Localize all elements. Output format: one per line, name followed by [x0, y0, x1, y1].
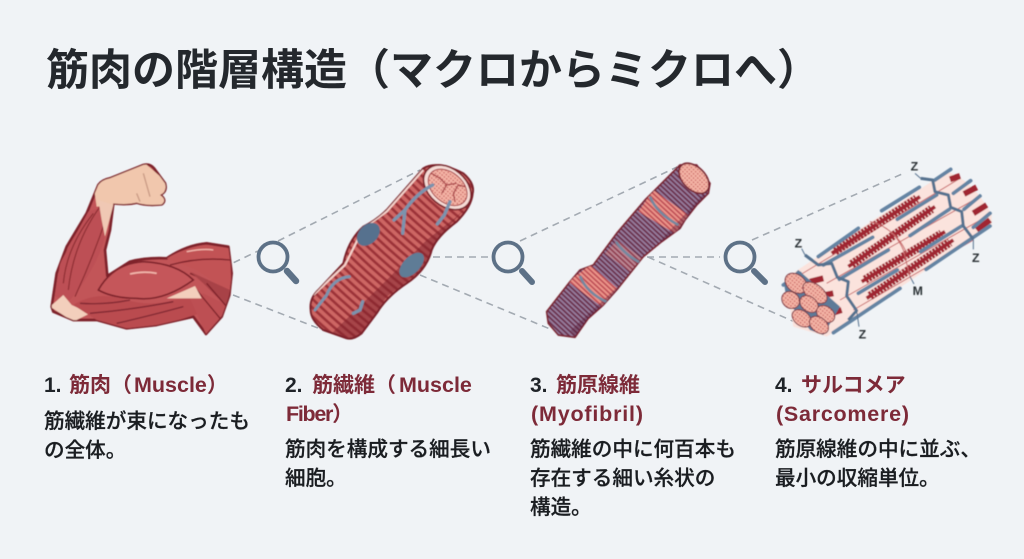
- labels Z and M: Z: [972, 251, 980, 265]
- text block: 2 muscle fiber: 2.: [285, 374, 303, 397]
- blue actin filaments: [783, 169, 990, 333]
- thin filaments: [800, 178, 983, 310]
- text block: 4 sarcomere: 4.: [775, 374, 793, 397]
- text block: 2 muscle fiber: [285, 373, 491, 490]
- end rim: [784, 270, 840, 335]
- illustration: myofibril: [547, 158, 715, 337]
- front ellipses: [778, 269, 838, 337]
- connector lines: muscle to fiber: [212, 170, 420, 330]
- text block: 3 myofibril: 筋原線維: [556, 374, 640, 397]
- labels Z and M: Z: [795, 236, 803, 250]
- connector lines: myofibril to sarcomere: [647, 174, 902, 323]
- text block: 1 muscle: 筋繊維が束になったも: [44, 410, 250, 433]
- text block: 4 sarcomere: サルコメア: [801, 374, 906, 397]
- text block: 1 muscle: 筋肉（: [69, 374, 132, 397]
- Z disks: [805, 178, 973, 320]
- text block: 3 myofibril: [530, 374, 736, 519]
- text block: 2 muscle fiber: 筋繊維（: [312, 374, 396, 397]
- icon: magnifier 3: [726, 242, 765, 282]
- text block: 2 muscle fiber: 筋肉を構成する細長い: [285, 438, 491, 461]
- labels Z and M: [795, 160, 980, 341]
- title: 筋肉の階層構造（マクロからミクロへ）: [46, 47, 820, 95]
- text block: 1 muscle: 1.: [44, 374, 62, 397]
- text block: 2 muscle fiber: 細胞。: [285, 467, 347, 490]
- text block: 4 sarcomere: [775, 374, 981, 490]
- cylinder body: [785, 172, 992, 337]
- illustration: muscle fiber: [310, 156, 480, 340]
- labels Z and M: M: [913, 284, 923, 298]
- text block: 1 muscle: [44, 373, 250, 462]
- text block: 2 muscle fiber: Muscle: [399, 373, 472, 397]
- text block: 3 myofibril: 構造。: [530, 496, 592, 519]
- labels Z and M: Z: [859, 327, 867, 341]
- text block: 1 muscle: Muscle）: [134, 373, 228, 397]
- text block: 3 myofibril: 3.: [530, 374, 548, 397]
- thick myosin filaments: [810, 176, 990, 313]
- icon: magnifier 1: [258, 242, 296, 281]
- text block: 1 muscle: の全体。: [44, 439, 126, 462]
- text block: 3 myofibril: (Myofibril): [531, 402, 643, 426]
- text block: 3 myofibril: 存在する細い糸状の: [530, 467, 715, 490]
- text block: 4 sarcomere: (Sarcomere): [776, 402, 909, 426]
- icon: magnifier 2: [494, 242, 532, 282]
- text block: 3 myofibril: 筋繊維の中に何百本も: [530, 438, 736, 461]
- text block: 4 sarcomere: 最小の収縮単位。: [775, 467, 940, 490]
- labels Z and M: Z: [911, 160, 919, 174]
- text block: 2 muscle fiber: Fiber）: [286, 402, 353, 426]
- M line: [870, 222, 910, 277]
- text block: 4 sarcomere: 筋原線維の中に並ぶ、: [775, 438, 981, 461]
- connector lines: fiber to myofibril: [420, 167, 677, 329]
- illustration: arm muscle: [50, 163, 232, 334]
- illustration: sarcomere: [778, 160, 992, 341]
